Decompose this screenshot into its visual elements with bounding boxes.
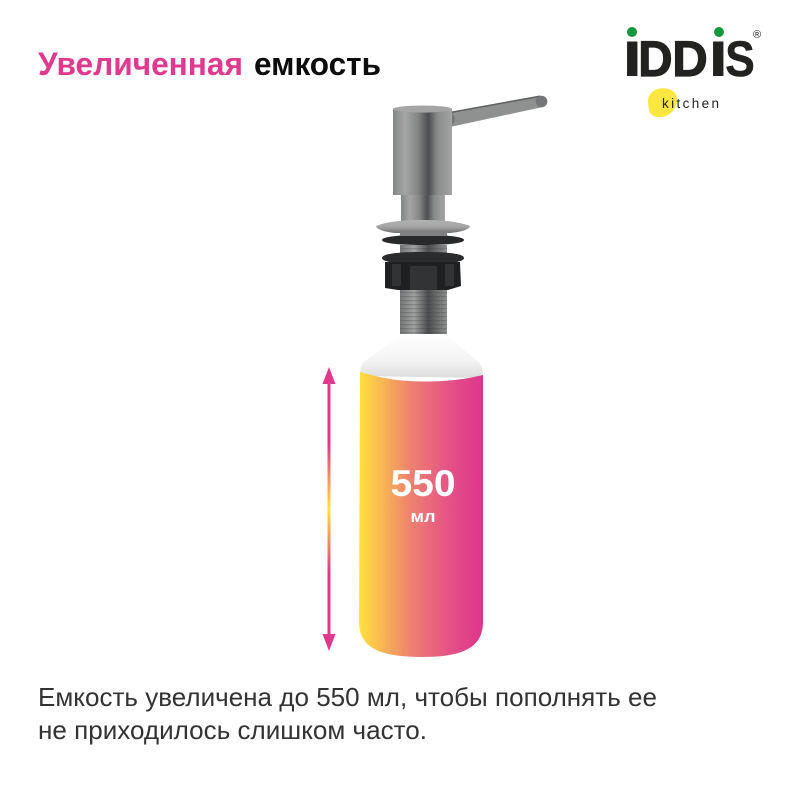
logo wordmark: I xyxy=(708,31,728,87)
logo dots xyxy=(627,27,724,37)
description text: не приходилось слишком часто. xyxy=(38,715,427,745)
pump body xyxy=(393,106,452,195)
logo: IDDIS kitchen xyxy=(622,27,761,117)
logo wordmark: D xyxy=(672,31,708,87)
flange xyxy=(376,220,470,233)
spout xyxy=(441,96,547,127)
title xyxy=(38,46,381,82)
rubber washer xyxy=(382,235,464,245)
title: емкость xyxy=(254,46,381,82)
logo wordmark: S xyxy=(725,31,755,87)
bottle gradient fill xyxy=(359,372,483,657)
logo wordmark xyxy=(622,31,755,87)
yellow blob xyxy=(648,88,677,117)
black nut xyxy=(382,252,464,290)
logo wordmark: D xyxy=(638,31,672,87)
logo wordmark: I xyxy=(622,31,642,87)
bottle xyxy=(359,334,483,657)
registered mark: ® xyxy=(753,29,761,41)
dispenser pump xyxy=(376,96,547,334)
threaded stem xyxy=(400,290,447,334)
capacity unit: мл xyxy=(410,508,436,526)
description text: Емкость увеличена до 550 мл, чтобы пополнять ее xyxy=(38,682,657,712)
bottle shoulder xyxy=(360,334,483,378)
description text xyxy=(38,682,657,745)
short thread xyxy=(400,232,447,254)
height arrow xyxy=(322,367,336,651)
capacity value: 550 xyxy=(390,463,456,504)
neck xyxy=(401,195,445,223)
kitchen label: kitchen xyxy=(662,96,719,111)
title: Увеличенная xyxy=(38,46,243,82)
